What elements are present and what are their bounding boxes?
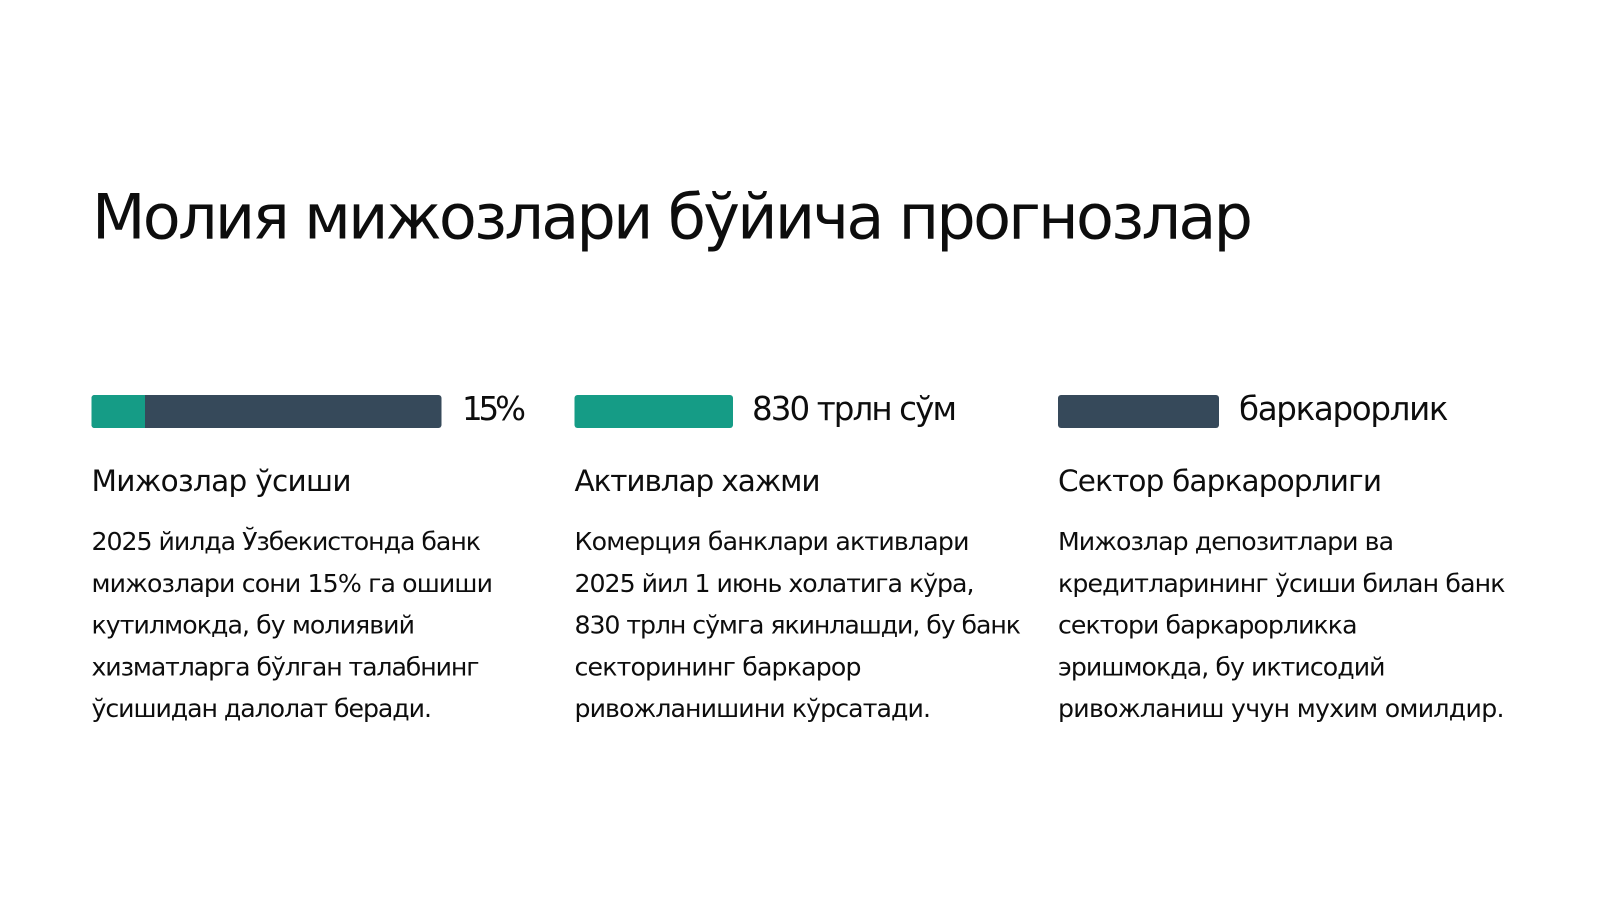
- body text: [1058, 527, 1506, 723]
- stat value: 830 трлн сўм: [752, 390, 957, 428]
- body text: кутилмокда, бу молиявий: [92, 611, 415, 640]
- body text: хизматларга бўлган талабнинг: [92, 652, 480, 681]
- body text: [92, 527, 493, 723]
- body text: [574, 527, 1021, 723]
- body text: Комерция банклари активлари: [574, 527, 970, 556]
- panel: sector stability: [1058, 390, 1506, 723]
- body text: кредитларининг ўсиши билан банк: [1058, 569, 1506, 598]
- body text: 830 трлн сўмга якинлашди, бу банк: [574, 611, 1021, 640]
- panel heading: Мижозлар ўсиши: [92, 464, 352, 498]
- body text: сектори баркарорликка: [1058, 611, 1358, 640]
- panel heading: Активлар хажми: [574, 464, 820, 498]
- body text: 2025 йилда Ўзбекистонда банк: [92, 527, 481, 556]
- stat value: баркарорлик: [1239, 390, 1448, 428]
- body text: Мижозлар депозитлари ва: [1058, 527, 1394, 556]
- stat value: 15%: [462, 390, 526, 428]
- bar: assets: [574, 395, 733, 428]
- panel: asset volume: [574, 390, 1021, 723]
- bar: stability: [1058, 395, 1219, 428]
- panel: client growth: [92, 390, 526, 723]
- body text: 2025 йил 1 июнь холатига кўра,: [574, 569, 974, 598]
- body text: ривожланишини кўрсатади.: [574, 694, 931, 723]
- panel heading: Сектор баркарорлиги: [1058, 464, 1382, 498]
- body text: ўсишидан далолат беради.: [92, 694, 432, 723]
- body text: мижозлари сони 15% га ошиши: [92, 569, 493, 598]
- title: Молия мижозлари бўйича прогнозлар: [92, 180, 1253, 254]
- body text: ривожланиш учун мухим омилдир.: [1058, 694, 1504, 723]
- bar: 15% progress: [92, 395, 442, 428]
- body text: секторининг баркарор: [574, 652, 862, 681]
- body text: эришмокда, бу иктисодий: [1058, 652, 1386, 681]
